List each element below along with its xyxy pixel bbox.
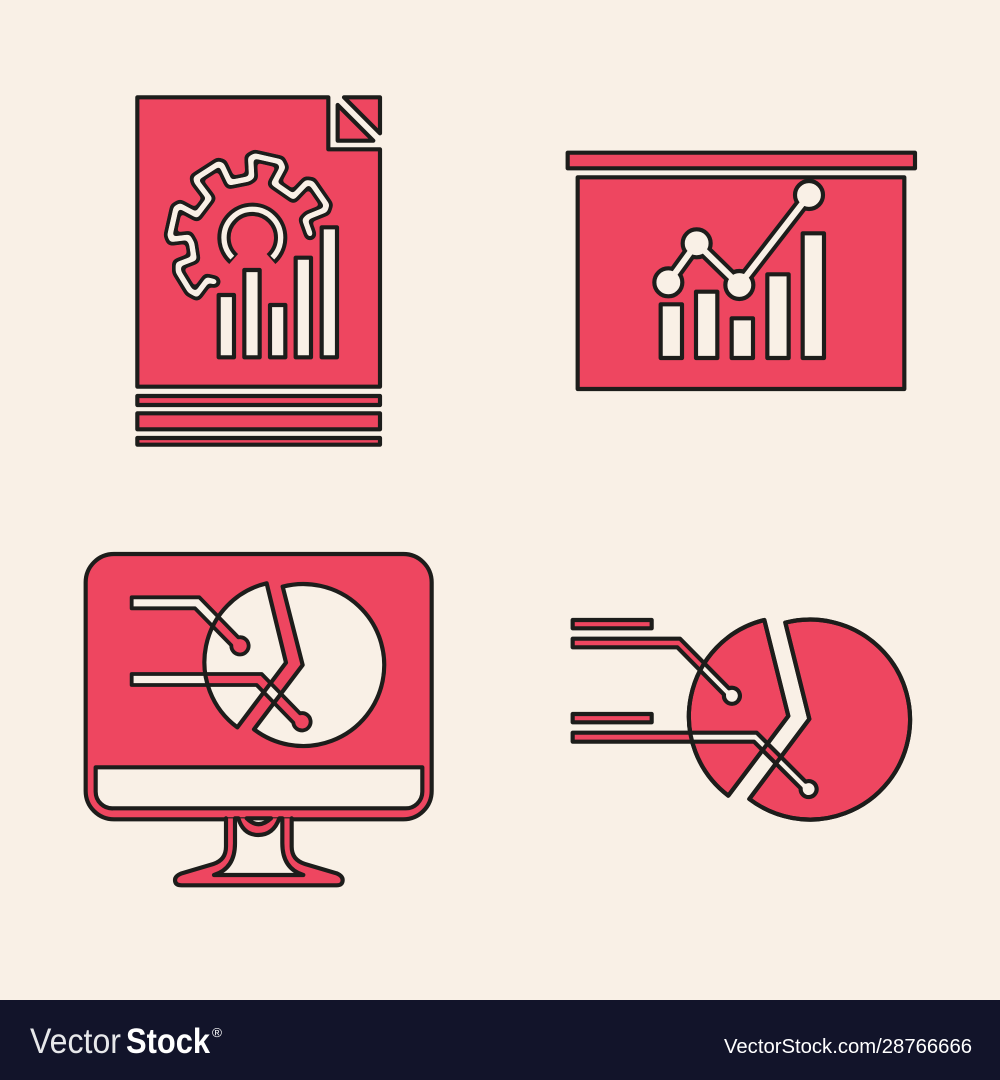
board top rail (568, 153, 915, 168)
footer bar (0, 1000, 1000, 1080)
bar chart (661, 233, 824, 358)
footer logo: ® (212, 1025, 222, 1040)
monitor chin panel (96, 767, 422, 808)
footer logo: Stock (126, 1022, 210, 1061)
pie connectors (132, 583, 384, 746)
icon: presentation board with line and bar chart (568, 153, 915, 389)
pie chart (204, 583, 384, 746)
document page (137, 97, 380, 387)
folded corner (338, 97, 380, 141)
monitor stand (175, 818, 343, 885)
gear centre arc (224, 209, 281, 259)
bar chart (219, 227, 337, 357)
footer logo (30, 1022, 222, 1061)
icon: monitor with pie chart (86, 554, 432, 885)
board surface (578, 177, 904, 389)
footer image id: VectorStock.com/28766666 (724, 1035, 972, 1058)
pie slices (689, 620, 910, 820)
label bars (573, 620, 652, 722)
line chart (654, 181, 823, 299)
monitor body (86, 554, 432, 819)
icon: document with gear and bar chart (137, 97, 380, 445)
document text lines (137, 396, 380, 445)
footer logo: Vector (30, 1022, 121, 1061)
gear (170, 156, 327, 294)
pie connectors (573, 620, 910, 820)
icon: pie chart with labels (573, 620, 910, 820)
